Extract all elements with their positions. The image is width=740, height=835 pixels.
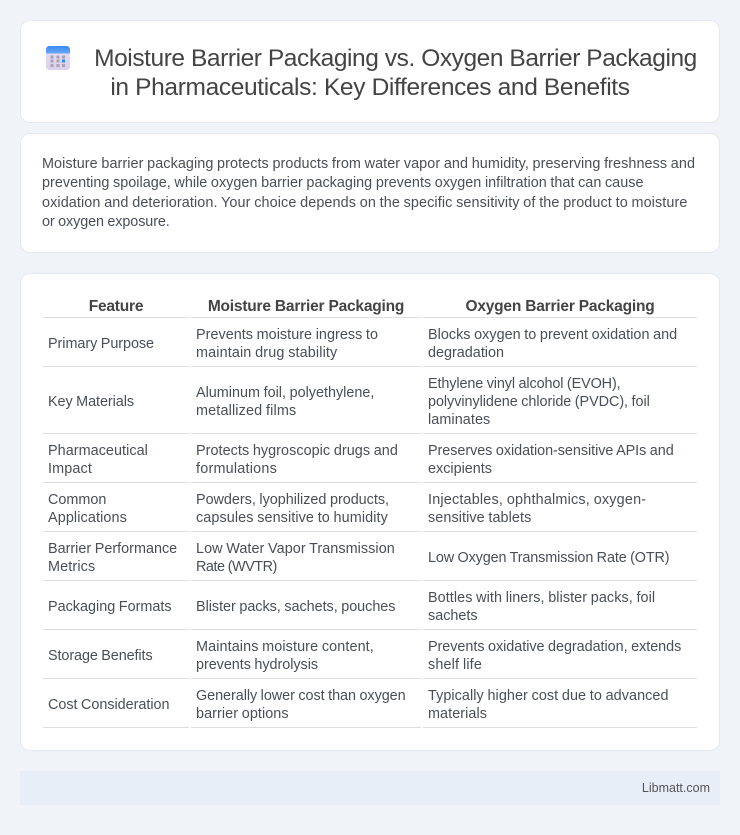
row: common applications: Injectables, ophthalmics, oxygen- <box>428 492 646 508</box>
row: primary purpose: Prevents moisture ingress to <box>196 327 378 343</box>
footer <box>20 771 720 805</box>
row: key materials: Aluminum foil, polyethylene, <box>196 385 374 401</box>
row: key materials: laminates <box>428 412 490 428</box>
table header: feature: Feature <box>89 298 143 315</box>
table header: oxygen barrier packaging <box>423 298 697 318</box>
row: pharmaceutical impact <box>48 443 674 477</box>
row: barrier performance metrics: Barrier Performance <box>48 541 177 557</box>
row: common applications: Common <box>48 492 106 508</box>
row: cost consideration: materials <box>428 706 487 722</box>
row: key materials <box>48 376 650 428</box>
row: barrier performance metrics: Low Oxygen Transmission Rate (OTR) <box>428 550 669 566</box>
row: barrier performance metrics: Metrics <box>48 559 95 575</box>
table header: feature <box>43 298 189 318</box>
row: common applications: capsules sensitive to humidity <box>196 510 388 526</box>
row: storage benefits: shelf life <box>428 657 482 673</box>
row: packaging formats: Blister packs, sachets, pouches <box>196 599 395 615</box>
row: storage benefits: Maintains moisture content, <box>196 639 374 655</box>
intro text <box>42 156 695 230</box>
intro text: oxidation and deterioration. Your choice depends on the specific sensitivity of the product to moisture <box>42 194 687 210</box>
row: pharmaceutical impact: Pharmaceutical <box>48 443 148 459</box>
row: storage benefits: prevents hydrolysis <box>196 657 318 673</box>
row: primary purpose: maintain drug stability <box>196 345 337 361</box>
row: storage benefits: Storage Benefits <box>48 648 153 664</box>
row: primary purpose: Blocks oxygen to prevent oxidation and <box>428 327 677 343</box>
table header: moisture barrier packaging: Moisture Barrier Packaging <box>208 298 404 315</box>
row: packaging formats <box>48 590 655 624</box>
row: packaging formats: sachets <box>428 608 478 624</box>
row: pharmaceutical impact: excipients <box>428 461 492 477</box>
panel: comparison table <box>20 273 720 751</box>
row: common applications: Applications <box>48 510 127 526</box>
row: storage benefits <box>48 639 681 673</box>
row: primary purpose: Primary Purpose <box>48 336 154 352</box>
row: pharmaceutical impact: Protects hygroscopic drugs and <box>196 443 398 459</box>
row: packaging formats: Packaging Formats <box>48 599 172 615</box>
row: cost consideration <box>48 688 669 722</box>
panel: title card <box>20 20 720 123</box>
intro text: preventing spoilage, while oxygen barrier packaging prevents oxygen infiltration that can cause <box>42 175 643 191</box>
row: storage benefits: Prevents oxidative degradation, extends <box>428 639 681 655</box>
footer credit: Libmatt.com <box>642 781 710 795</box>
row: cost consideration: Typically higher cost due to advanced <box>428 688 669 704</box>
title <box>94 45 697 101</box>
row: key materials: Key Materials <box>48 394 134 410</box>
row: pharmaceutical impact: Impact <box>48 461 92 477</box>
row: barrier performance metrics: Rate (WVTR) <box>196 559 277 575</box>
row: barrier performance metrics <box>48 541 669 575</box>
row: primary purpose: degradation <box>428 345 504 361</box>
title: Moisture Barrier Packaging vs. Oxygen Barrier Packaging <box>94 45 697 72</box>
icon: calendar <box>46 46 70 70</box>
row: pharmaceutical impact: Preserves oxidation-sensitive APIs and <box>428 443 674 459</box>
panel: introduction <box>20 133 720 253</box>
row: barrier performance metrics: Low Water Vapor Transmission <box>196 541 395 557</box>
row: primary purpose <box>48 327 677 361</box>
row: key materials: Ethylene vinyl alcohol (EVOH), <box>428 376 621 392</box>
row: pharmaceutical impact: formulations <box>196 461 277 477</box>
row: common applications: sensitive tablets <box>428 510 531 526</box>
row: key materials: polyvinylidene chloride (PVDC), foil <box>428 394 650 410</box>
intro text: Moisture barrier packaging protects products from water vapor and humidity, preserving freshness and <box>42 156 695 172</box>
row: cost consideration: barrier options <box>196 706 289 722</box>
row: common applications <box>48 492 646 526</box>
title: in Pharmaceuticals: Key Differences and Benefits <box>110 74 630 101</box>
row: cost consideration: Cost Consideration <box>48 697 169 713</box>
row: key materials: metallized films <box>196 403 296 419</box>
table header: oxygen barrier packaging: Oxygen Barrier Packaging <box>465 298 655 315</box>
row: common applications: Powders, lyophilized products, <box>196 492 389 508</box>
intro text: or oxygen exposure. <box>42 214 170 230</box>
row: cost consideration: Generally lower cost than oxygen <box>196 688 406 704</box>
row: packaging formats: Bottles with liners, blister packs, foil <box>428 590 655 606</box>
